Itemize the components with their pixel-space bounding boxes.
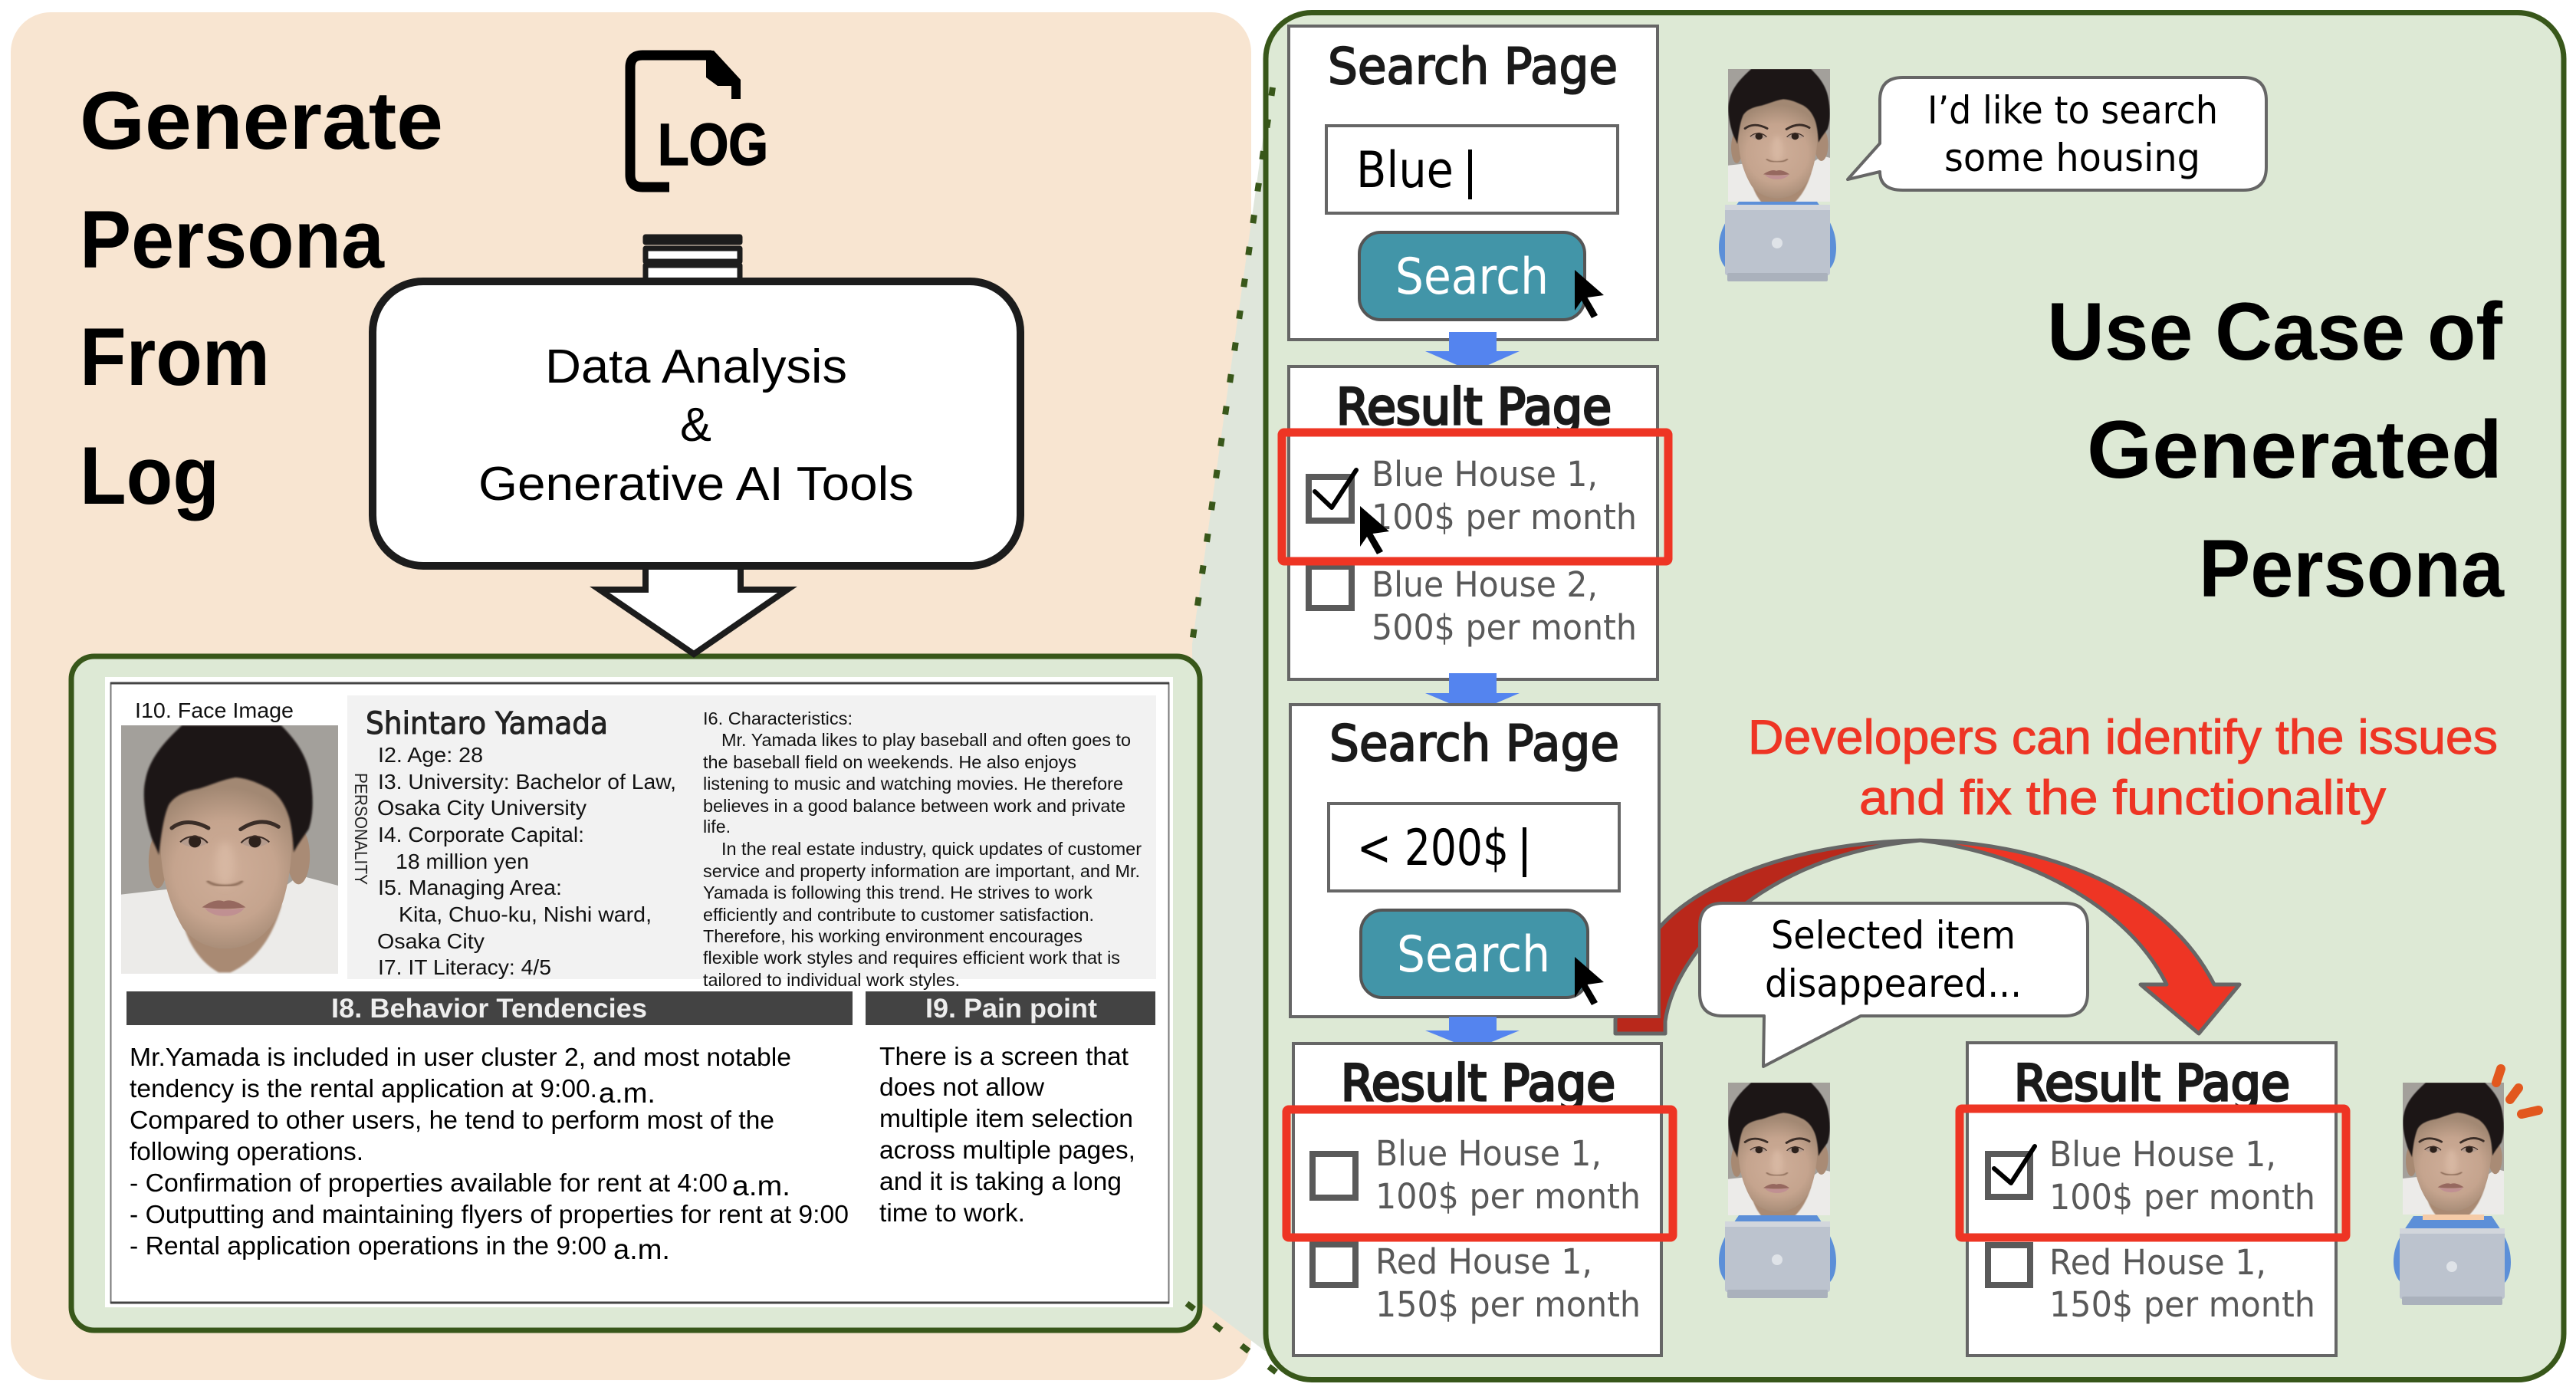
wireframe: result page 2: 100$ per month — [1375, 1176, 1641, 1217]
wireframe: result page 3: 100$ per month — [2049, 1177, 2315, 1218]
wireframe: search page 2: Search Page — [1329, 715, 1619, 773]
wireframe: search page 1: Search — [1395, 248, 1549, 306]
data analysis and generative AI tools box: & — [680, 399, 711, 452]
persona avatar 1 — [1714, 69, 1845, 281]
pain point text: does not allow — [879, 1073, 1044, 1101]
pain point text — [879, 1042, 1135, 1227]
callout: developers can identify the issues: and fix the functionality — [1859, 771, 2387, 825]
characteristics text: believes in a good balance between work and private — [703, 796, 1125, 816]
data analysis and generative AI tools box: Generative AI Tools — [478, 458, 914, 511]
heading: generate persona from log: From — [80, 311, 270, 403]
red curved arrow — [1615, 840, 2239, 1034]
persona attributes: I2. Age: 28 — [378, 743, 483, 767]
face image label: I10. Face Image — [135, 698, 294, 722]
callout: developers can identify the issues: Developers can identify the issues — [1748, 711, 2498, 764]
panel: generate persona from log — [71, 51, 1200, 1330]
wireframe: result page 1: 100$ per month — [1372, 497, 1637, 537]
persona avatar 3 with surprise marks — [2390, 1069, 2538, 1305]
characteristics text: the baseball field on weekends. He also enjoys — [703, 752, 1076, 772]
behavior tendencies text — [130, 1043, 849, 1265]
characteristics text: life. — [703, 817, 731, 837]
heading: generate persona from log: Generate — [80, 74, 443, 166]
wireframe: result page 2: 150$ per month — [1375, 1284, 1641, 1325]
icon: log file: LOG — [658, 112, 768, 178]
persona attributes: I4. Corporate Capital: — [378, 823, 584, 846]
behavior tendencies text: following operations. — [130, 1137, 363, 1165]
speech bubble: search housing — [1848, 77, 2266, 190]
arrow: search to result — [1425, 1017, 1520, 1050]
wireframe: result page 3: 150$ per month — [2049, 1284, 2315, 1325]
dotted zoom connector lines — [1187, 87, 1276, 1372]
behavior tendencies text: a.m. — [613, 1234, 670, 1265]
wireframe: result page 3 — [1960, 1043, 2346, 1356]
heading: generate persona from log: Persona — [80, 193, 385, 285]
characteristics text: tailored to individual work styles. — [703, 970, 960, 990]
wireframe: result page 2: Blue House 1, — [1375, 1133, 1602, 1174]
characteristics text: Yamada is following this trend. He strives to work — [703, 883, 1093, 902]
wireframe: search page 1 — [1289, 26, 1658, 340]
speech bubble: selected item disappeared: disappeared... — [1765, 961, 2022, 1006]
behavior tendencies header — [127, 991, 853, 1025]
wireframe: result page 1: Blue House 2, — [1372, 564, 1598, 605]
behavior tendencies text: tendency is the rental application at 9:00. — [130, 1074, 597, 1103]
behavior tendencies text: Mr.Yamada is included in user cluster 2, and most notable — [130, 1043, 791, 1071]
arrow: result to search — [1425, 673, 1520, 713]
heading: use case of generated persona — [2047, 285, 2505, 614]
callout: developers can identify the issues — [1748, 711, 2498, 825]
icon: database stack — [646, 237, 740, 282]
icon: log file — [630, 51, 768, 187]
wireframe: result page 3: Blue House 1, — [2049, 1134, 2276, 1175]
heading: use case of generated persona: Use Case of — [2047, 285, 2502, 377]
face image — [121, 725, 338, 974]
characteristics text: I6. Characteristics: — [703, 708, 853, 728]
panel: use case of generated persona — [1266, 12, 2564, 1380]
persona attributes: I7. IT Literacy: 4/5 — [378, 955, 551, 979]
wireframe: result page 2: Result Page — [1341, 1055, 1615, 1113]
wireframe: search page 1: Blue — [1356, 142, 1454, 199]
persona attributes: 18 million yen — [396, 850, 529, 873]
wireframe: result page 1: 500$ per month — [1372, 607, 1637, 648]
data analysis and generative AI tools box — [373, 281, 1020, 566]
wireframe: result page 3: Red House 1, — [2049, 1242, 2266, 1283]
behavior tendencies text: - Confirmation of properties available for rent at 4:00 — [130, 1169, 728, 1197]
personality panel — [347, 695, 1156, 979]
persona attributes: Osaka City University — [377, 796, 586, 820]
characteristics text — [703, 708, 1142, 990]
wireframe: result page 1 — [1282, 367, 1668, 679]
wireframe: result page 2 — [1286, 1044, 1673, 1356]
pain point text: across multiple pages, — [879, 1136, 1135, 1164]
speech bubble: search housing: some housing — [1944, 136, 2200, 180]
persona attributes — [377, 743, 676, 979]
data analysis and generative AI tools box: Data Analysis — [545, 340, 847, 393]
behavior tendencies text: Compared to other users, he tend to perform most of the — [130, 1106, 774, 1134]
persona attributes: Osaka City — [377, 929, 485, 953]
behavior tendencies text: a.m. — [599, 1077, 656, 1109]
pain point header: I9. Pain point — [925, 994, 1097, 1024]
characteristics text: efficiently and contribute to customer satisfaction. — [703, 905, 1094, 925]
wireframe: result page 1: Blue House 1, — [1372, 454, 1598, 495]
arrow: search to result — [1425, 332, 1520, 372]
wireframe: result page 3: Result Page — [2014, 1055, 2290, 1113]
panel: persona card — [71, 656, 1200, 1330]
characteristics text: In the real estate industry, quick updates of customer — [721, 839, 1142, 859]
speech bubble: selected item disappeared: Selected item — [1771, 913, 2016, 958]
zoom wedge connecting persona to use case — [1192, 69, 1280, 1351]
arrow: tools to persona — [600, 570, 787, 654]
characteristics text: service and property information are important, and Mr. — [703, 861, 1140, 881]
left panel background — [11, 12, 1251, 1380]
characteristics text: listening to music and watching movies. He therefore — [703, 774, 1123, 794]
wireframe: result page 1: Result Page — [1336, 379, 1612, 436]
heading: generate persona from log — [80, 74, 443, 521]
wireframe: search page 2: Search — [1397, 926, 1550, 984]
behavior tendencies text: - Outputting and maintaining flyers of properties for rent at 9:00 — [130, 1200, 849, 1228]
personality vertical label: PERSONALITY — [351, 773, 371, 885]
characteristics text: flexible work styles and requires efficient work that is — [703, 948, 1120, 968]
persona avatar 2 — [1714, 1083, 1845, 1298]
pain point text: There is a screen that — [879, 1042, 1129, 1070]
persona attributes: I3. University: Bachelor of Law, — [378, 770, 676, 794]
pain point text: multiple item selection — [879, 1104, 1133, 1132]
pain point text: time to work. — [879, 1198, 1025, 1227]
persona attributes: Kita, Chuo-ku, Nishi ward, — [399, 902, 652, 926]
persona name: Shintaro Yamada — [366, 706, 608, 741]
pain point text: and it is taking a long — [879, 1167, 1122, 1195]
behavior tendencies text: a.m. — [732, 1170, 790, 1201]
wireframe: result page 2: Red House 1, — [1375, 1241, 1592, 1282]
speech bubble: selected item disappeared — [1700, 903, 2088, 1067]
behavior tendencies header: I8. Behavior Tendencies — [331, 994, 647, 1024]
wireframe: search page 1: Search Page — [1328, 38, 1618, 96]
heading: use case of generated persona: Persona — [2199, 522, 2505, 614]
behavior tendencies text: - Rental application operations in the 9:00 — [130, 1231, 606, 1260]
characteristics text: Mr. Yamada likes to play baseball and often goes to — [721, 730, 1131, 750]
wireframe: search page 2: < 200$ — [1357, 820, 1509, 877]
heading: use case of generated persona: Generated — [2087, 403, 2502, 495]
panel background — [1266, 12, 2564, 1380]
speech bubble: search housing: I’d like to search — [1927, 88, 2218, 133]
wireframe: search page 2 — [1290, 705, 1659, 1017]
characteristics text: Therefore, his working environment encourages — [703, 926, 1083, 946]
heading: generate persona from log: Log — [80, 429, 219, 521]
pain point header — [866, 991, 1155, 1025]
persona attributes: I5. Managing Area: — [378, 876, 562, 899]
